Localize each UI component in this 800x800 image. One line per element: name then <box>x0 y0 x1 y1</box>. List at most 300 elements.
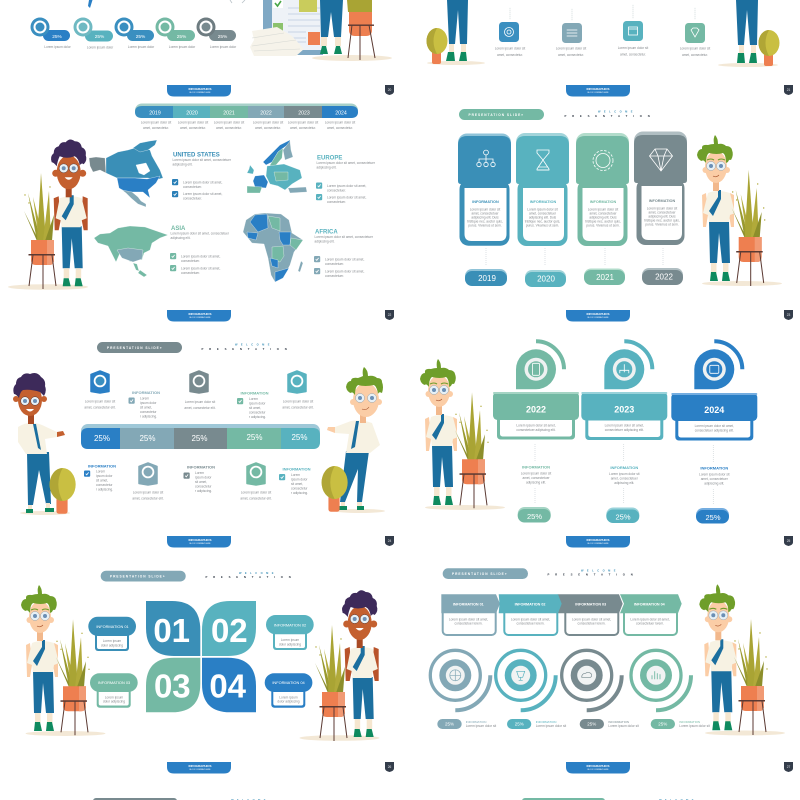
arrow row <box>441 594 682 613</box>
header pill: PRESENTATION SLIDE» <box>452 572 508 576</box>
information 01 <box>88 617 136 651</box>
percent tags: Lorem ipsum dolor sit <box>536 724 566 728</box>
header pill: PRESENTATION SLIDE» <box>107 346 163 350</box>
card 2020: amet, consectetuer <box>529 212 557 216</box>
year timeline bar: Lorem ipsum dolor sit <box>325 120 355 124</box>
page number <box>784 536 793 546</box>
information captions: INFORMATION <box>610 465 638 470</box>
year timeline bar: Lorem ipsum dolor sit <box>253 120 283 124</box>
information list 4: INFORMATION <box>187 464 215 470</box>
footer: INFOGRAPHICS <box>586 312 610 316</box>
map: europe <box>247 140 307 193</box>
information 04: Lorem ipsum <box>279 695 298 699</box>
welcome title: PRESENTATION <box>201 347 293 351</box>
footer: BLOCK COMPANY HERE <box>189 542 211 545</box>
footer <box>167 762 231 774</box>
heading and text: africa: Lorem ipsum dolor sit amet, <box>325 258 364 262</box>
information 03: dolor adipiscing <box>103 700 125 704</box>
year timeline bar: amet, consectetur. <box>216 126 242 130</box>
percent steps: Lorem ipsum dolor <box>87 46 114 50</box>
year timeline bar: amet, consectetur. <box>290 126 316 130</box>
frame captions: consectetuer lorem. <box>454 622 483 626</box>
slide 27: arrows and spiral circles <box>430 568 793 774</box>
card 2022 <box>634 132 687 245</box>
heading and text: europe: Lorem ipsum dolor sit amet, consectetuer <box>316 161 376 165</box>
spiral 1: globe <box>430 650 490 710</box>
afro boy with plant <box>8 140 88 290</box>
footer <box>167 310 231 322</box>
pin 2024 <box>694 341 742 389</box>
footer <box>566 536 630 548</box>
percent steps: Lorem ipsum dolor <box>128 45 155 49</box>
page number <box>784 310 793 320</box>
percent steps: Lorem ipsum dolor <box>169 45 196 49</box>
percent tags: Lorem ipsum dolor sit <box>679 724 710 728</box>
spiral 3: cloud <box>562 650 622 710</box>
information list 5: ipsum dolor <box>291 478 308 482</box>
heading and text: asia: adipiscing elit. <box>170 236 191 240</box>
year timeline bar <box>135 104 358 130</box>
percent steps: Lorem ipsum dolor <box>44 45 72 49</box>
heading and text: europe: adipiscing elit. <box>316 166 337 170</box>
frame captions <box>449 618 670 626</box>
hexagon captions: Lorem ipsum dolor sit <box>283 400 313 404</box>
information captions: Lorem ipsum dolor sit <box>609 472 640 476</box>
page number: 27 <box>787 765 790 769</box>
information list 3 <box>84 464 116 492</box>
information list 2: consectetur <box>249 410 266 414</box>
icon captions: amet, consectetur. <box>682 53 708 57</box>
year timeline bar: 2024 <box>335 110 347 116</box>
slide 22: world maps <box>8 104 394 322</box>
year timeline bar: 2019 <box>149 110 161 116</box>
percent bar: 25% <box>246 433 263 442</box>
footer: INFOGRAPHICS <box>188 87 212 91</box>
information list 1 <box>128 390 160 418</box>
map: asia <box>94 226 168 277</box>
welcome title <box>201 342 293 351</box>
card 2021: tristique nec, auctor quis, <box>585 220 621 224</box>
frame captions: consectetuer lorem. <box>636 622 664 626</box>
card 2020: adipiscing elit. Duis <box>529 216 557 220</box>
information list 5: sit amet, <box>291 482 303 486</box>
hexagon captions: amet, consectetur elit. <box>282 406 314 410</box>
heading and text: africa: AFRICA <box>315 230 338 236</box>
header pill <box>101 571 186 582</box>
card 2020: tristique nec, auctor quis, <box>525 220 560 224</box>
page number <box>385 85 394 95</box>
year block 2023: Lorem ipsum dolor sit amet, <box>605 424 644 428</box>
heading and text: europe: consectetuer. <box>327 200 346 204</box>
information list 5: consectetur <box>291 486 308 490</box>
percent tags: 25% <box>445 722 454 727</box>
icon tiles <box>499 5 705 43</box>
information captions: INFORMATION <box>700 466 728 470</box>
percent tags: 25% <box>515 722 524 727</box>
information 04 <box>265 673 312 708</box>
percent steps: 25% <box>52 34 63 40</box>
page number: 23 <box>787 313 790 317</box>
year pills: 2021 <box>596 273 614 282</box>
percent steps: 25% <box>136 34 146 40</box>
heading and text: asia: consectetuer. <box>181 259 200 263</box>
heading and text: united states <box>172 152 232 200</box>
heading and text: united states: UNITED STATES <box>173 152 220 158</box>
page number <box>385 762 394 772</box>
page number <box>784 762 793 772</box>
hexagon captions: amet, consectetur elit. <box>240 496 272 500</box>
card 2021 <box>576 133 629 246</box>
heading and text: europe <box>316 156 376 204</box>
card 2021: Lorem ipsum dolor sit <box>588 208 618 212</box>
heading and text: africa: consectetuer. <box>325 274 344 278</box>
percent tags: 25% <box>587 722 596 727</box>
information list 3: Lorem <box>96 470 105 474</box>
slide 25: three year pins <box>420 341 793 548</box>
heading and text: united states: adipiscing elit. <box>172 162 193 166</box>
hexagon icons <box>91 371 306 485</box>
heading and text: united states: Lorem ipsum dolor sit amet, consectetuer <box>172 158 232 162</box>
year timeline bar: Lorem ipsum dolor sit <box>141 120 171 124</box>
heading and text: africa: adipiscing elit. <box>314 240 335 244</box>
arrow row: INFORMATION 01 <box>453 602 484 606</box>
boy with plant left <box>21 585 106 736</box>
year pills <box>465 268 683 287</box>
page number <box>784 85 793 95</box>
information list 5 <box>279 466 311 495</box>
information captions: Lorem ipsum dolor sit <box>699 472 730 476</box>
information list 5: INFORMATION <box>283 466 311 472</box>
boy with plant <box>699 584 785 736</box>
slide 26: four numbered petals <box>21 571 394 774</box>
footer <box>566 310 630 322</box>
percent tags: Lorem ipsum dolor sit <box>466 724 496 728</box>
percent tags: INFORMATION <box>608 720 629 724</box>
information 01: dolor adipiscing <box>101 643 123 647</box>
frame captions: Lorem ipsum dolor sit amet, <box>572 618 611 622</box>
icon: diamond <box>650 149 672 171</box>
arrow row: INFORMATION 03 <box>575 602 606 606</box>
year block 2023: 2023 <box>614 404 634 414</box>
card 2022: tristique nec, auctor quis, <box>644 218 680 222</box>
footer: BLOCK COMPANY HERE <box>587 91 609 94</box>
petal grid: 03 <box>154 668 191 704</box>
year timeline bar: Lorem ipsum dolor sit <box>178 120 208 124</box>
percent bar <box>81 424 320 449</box>
heading and text: asia: consectetuer. <box>181 271 200 275</box>
information list 4: ipsum dolor <box>195 476 212 480</box>
footer: INFOGRAPHICS <box>188 764 212 768</box>
connectors <box>486 248 663 266</box>
icon: hourglass <box>537 150 549 170</box>
percent bar: 25% <box>291 433 308 442</box>
percent bar: 25% <box>139 434 156 443</box>
header pill <box>97 342 182 353</box>
information 04: INFORMATION 04 <box>272 680 306 685</box>
year block 2024 <box>671 393 757 440</box>
year timeline bar: 2020 <box>186 110 198 116</box>
information list 1: consectetur <box>140 410 157 414</box>
heading and text: united states: consectetuer. <box>183 185 202 189</box>
footer: BLOCK COMPANY HERE <box>587 316 609 319</box>
information list 1: r adipiscing. <box>140 414 157 418</box>
header pill: PRESENTATION SLIDE» <box>110 574 166 578</box>
heading and text: europe: Lorem ipsum dolor sit amet, <box>327 196 366 200</box>
information 02: INFORMATION 02 <box>274 622 306 627</box>
frame captions: Lorem ipsum dolor sit amet, <box>449 618 488 622</box>
welcome title <box>564 110 656 118</box>
footer: INFOGRAPHICS <box>188 312 212 316</box>
hexagon captions: Lorem ipsum dolor sit <box>85 400 115 404</box>
year timeline bar: Lorem ipsum dolor sit <box>288 120 318 124</box>
year block 2024: Lorem ipsum dolor sit amet, <box>695 424 734 428</box>
boy with plant <box>420 359 505 510</box>
year block 2022: 2022 <box>526 404 546 414</box>
information list 5: r adipiscing. <box>291 491 308 495</box>
hexagon captions: Lorem ipsum dolor sit <box>185 400 215 404</box>
next slide fragment right <box>522 798 697 800</box>
page number <box>385 310 394 320</box>
year timeline bar: amet, consectetur. <box>255 126 281 130</box>
information 03: Lorem ipsum <box>105 695 124 699</box>
page number: 20 <box>388 88 391 92</box>
slide 24: percentage bar <box>13 342 394 548</box>
page number: 21 <box>787 88 790 92</box>
information captions: amet, consectetuer <box>701 477 729 481</box>
next slide fragment left <box>93 798 269 800</box>
footer <box>566 762 630 774</box>
heading and text: europe: Lorem ipsum dolor sit amet, <box>327 184 366 188</box>
information list 4: Lorem <box>195 471 204 475</box>
year pills: 2019 <box>478 274 496 283</box>
footer <box>167 85 231 96</box>
heading and text: africa: consectetuer. <box>325 262 344 266</box>
page number: 24 <box>388 539 391 543</box>
pin 2022 <box>516 341 564 389</box>
card 2019: tristique nec, auctor quis, <box>467 220 503 224</box>
card 2022: adipiscing elit. Duis <box>648 214 676 218</box>
icon captions: amet, consectetur. <box>558 53 584 57</box>
icon captions: Lorem ipsum dolor sit <box>556 46 586 50</box>
hexagon captions: Lorem ipsum dolor sit <box>241 490 271 494</box>
petal grid: 01 <box>153 612 190 649</box>
year timeline bar: 2023 <box>298 110 310 116</box>
map fragment <box>88 0 92 8</box>
icon: gear <box>593 150 613 170</box>
heading and text: africa: Lorem ipsum dolor sit amet, <box>325 270 364 274</box>
map: africa <box>243 213 303 282</box>
header pill <box>459 109 544 120</box>
information captions: amet, consectetuer <box>522 476 550 480</box>
information list 3: sit amet, <box>96 478 108 482</box>
year timeline bar: amet, consectetur. <box>143 126 169 130</box>
green-hair boy pointing <box>327 367 385 513</box>
icon: network <box>477 150 495 167</box>
petal grid: 02 <box>211 612 248 649</box>
information captions: adipiscing elit. <box>614 481 634 485</box>
information list 3: r adipiscing. <box>96 488 113 492</box>
year block 2022 <box>493 392 579 440</box>
percent pills: 25% <box>527 512 542 521</box>
welcome title: WELCOME <box>235 342 273 346</box>
card 2022: amet, consectetuer <box>648 210 676 214</box>
information captions: INFORMATION <box>522 464 550 470</box>
percent tags: 25% <box>658 722 667 727</box>
percent pills: 25% <box>615 512 631 521</box>
heading and text: asia: Lorem ipsum dolor sit amet, <box>181 266 220 270</box>
slide 21: four icons <box>426 0 793 96</box>
information list 4: sit amet, <box>195 480 207 484</box>
year timeline bar: 2021 <box>223 110 235 116</box>
spiral 2: trophy <box>496 650 556 710</box>
page number: 22 <box>388 313 391 317</box>
arrow fragments <box>230 0 245 3</box>
petal grid: 04 <box>209 668 247 704</box>
card 2021: purus. Vivamus ut sem. <box>586 224 620 228</box>
petal grid <box>146 601 256 712</box>
frame captions: consectetuer lorem. <box>578 622 606 626</box>
welcome title <box>205 571 297 579</box>
card 2019: Lorem ipsum dolor sit <box>470 208 500 212</box>
icon captions: Lorem ipsum dolor sit <box>680 46 710 50</box>
percent pills: 25% <box>705 513 721 522</box>
pin 2023 <box>604 341 652 389</box>
arrow row: INFORMATION 04 <box>634 602 666 606</box>
welcome title: WELCOME <box>598 110 636 114</box>
information list 2: Lorem <box>249 397 258 401</box>
percent steps: Lorem ipsum dolor <box>210 45 237 49</box>
information list 1: ipsum dolor <box>140 401 157 405</box>
icon captions <box>495 46 710 57</box>
heading and text: europe: EUROPE <box>317 156 342 162</box>
welcome title: PRESENTATION <box>205 575 297 579</box>
icon captions: amet, consectetur. <box>620 52 646 56</box>
year timeline bar: amet, consectetur. <box>180 126 206 130</box>
card 2022: purus. Vivamus ut sem. <box>645 222 679 226</box>
information captions: Lorem ipsum dolor sit <box>521 472 551 476</box>
cactus left <box>50 468 76 514</box>
heading and text: africa: Lorem ipsum dolor sit amet, consectetuer <box>314 235 374 239</box>
year block 2022: consectetuer adipiscing elit. <box>516 428 556 432</box>
information 01: INFORMATION 01 <box>96 624 129 629</box>
information 02: Lorem ipsum <box>281 638 300 642</box>
card 2020: Lorem ipsum dolor sit <box>527 208 558 212</box>
percent steps: 25% <box>218 34 228 40</box>
information list 3: INFORMATION <box>88 464 116 468</box>
header pill: PRESENTATION SLIDE» <box>468 113 524 117</box>
information captions: adipiscing elit. <box>526 480 546 484</box>
information 02: dolor adipiscing <box>279 642 301 646</box>
percent tags: INFORMATION <box>679 720 700 724</box>
hexagon captions: amet, consectetur elit. <box>84 406 116 410</box>
frame captions: Lorem ipsum dolor sit amet, <box>511 618 550 622</box>
percent pills <box>518 507 729 524</box>
card 2020: INFORMATION <box>530 200 557 204</box>
percent steps: 25% <box>177 34 187 40</box>
year pills: 2020 <box>537 274 555 284</box>
percent bar: 25% <box>94 434 110 443</box>
boy legs with cactus right <box>718 0 780 67</box>
card 2019: adipiscing elit. Duis <box>471 216 499 220</box>
card 2021: INFORMATION <box>590 200 617 204</box>
spiral 4: chart <box>631 650 691 710</box>
footer: BLOCK COMPANY HERE <box>587 768 609 771</box>
information list 2: ipsum dolor <box>249 402 266 406</box>
information list 1: INFORMATION <box>132 390 160 395</box>
hexagon captions: Lorem ipsum dolor sit <box>133 490 163 494</box>
footer <box>566 85 630 96</box>
icon captions: Lorem ipsum dolor sit <box>495 46 525 50</box>
year timeline bar: Lorem ipsum dolor sit <box>214 120 244 124</box>
footer: INFOGRAPHICS <box>188 538 212 542</box>
page number: 25 <box>787 539 790 543</box>
information 04: dolor adipiscing <box>277 700 300 704</box>
heading and text: asia <box>170 226 230 275</box>
information captions: adipiscing elit. <box>704 482 724 486</box>
heading and text: united states: Lorem ipsum dolor sit amet, <box>183 192 222 196</box>
footer: INFOGRAPHICS <box>586 87 610 91</box>
year block 2024: consectetuer adipiscing elit. <box>695 428 734 432</box>
heading and text: united states: consectetuer. <box>183 196 202 200</box>
information list 3: ipsum dolor <box>96 474 113 478</box>
percent steps: 25% <box>95 34 105 40</box>
hexagon captions: amet, consectetur elit. <box>132 496 164 500</box>
card 2022: INFORMATION <box>649 199 676 203</box>
afro boy with plant right <box>300 590 380 741</box>
year pills: 2022 <box>655 272 673 282</box>
clipboard with paper stack <box>250 0 323 56</box>
year block 2022: Lorem ipsum dolor sit amet, <box>516 424 556 428</box>
information list 1: sit amet, <box>140 406 152 410</box>
information list 2 <box>237 390 269 419</box>
card 2020: purus. Vivamus ut sem. <box>526 224 559 228</box>
year timeline bar: 2022 <box>260 110 272 116</box>
footer: INFOGRAPHICS <box>586 764 610 768</box>
information 02 <box>266 615 314 650</box>
footer: BLOCK COMPANY HERE <box>189 91 211 94</box>
year block 2023: consectetuer adipiscing elit. <box>605 428 644 432</box>
map: north america <box>89 140 163 207</box>
card 2022: Lorem ipsum dolor sit <box>647 206 677 210</box>
information list 3: consectetur <box>96 483 113 487</box>
footer <box>167 536 231 548</box>
welcome title: WELCOME <box>581 568 619 572</box>
welcome title: PRESENTATION <box>564 114 656 118</box>
card 2021: amet, consectetuer <box>589 212 617 216</box>
percent tags <box>437 719 710 729</box>
connectors <box>535 444 713 505</box>
percent bar: 25% <box>191 434 208 443</box>
afro boy pointing <box>13 373 70 515</box>
page number <box>385 536 394 546</box>
card 2020 <box>516 133 569 246</box>
information list 4: consectetur <box>195 484 212 488</box>
card 2019: amet, consectetuer <box>471 212 499 216</box>
welcome title: PRESENTATION <box>547 572 639 576</box>
heading and text: africa <box>314 230 374 278</box>
percent tags: Lorem ipsum dolor sit <box>608 724 639 728</box>
welcome title <box>547 568 639 576</box>
boy legs with cactus left <box>426 0 485 65</box>
arrow row: INFORMATION 02 <box>515 602 545 606</box>
information list 2: sit amet, <box>249 406 261 410</box>
boy with plant <box>697 135 782 286</box>
heading and text: asia: Lorem ipsum dolor sit amet, consectetuer <box>170 232 230 236</box>
information 03 <box>90 673 138 708</box>
hexagon captions: amet, consectetur elit. <box>184 406 216 410</box>
footer: INFOGRAPHICS <box>586 538 610 542</box>
year block 2023 <box>581 392 667 440</box>
